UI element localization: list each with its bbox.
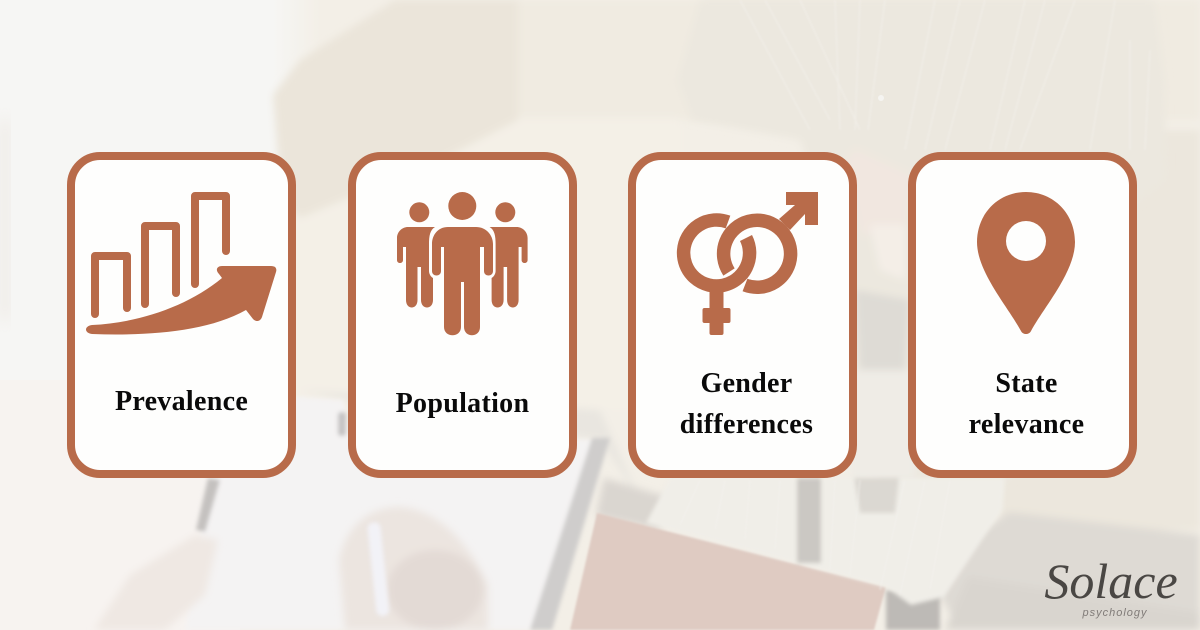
sofa	[515, 0, 1200, 120]
card: Gender differences	[628, 152, 857, 478]
label: differences	[680, 409, 813, 440]
shirt top	[677, 0, 1166, 500]
label: relevance	[969, 409, 1084, 440]
logo: Solace psychology: psychology	[1081, 607, 1148, 619]
shirt button	[878, 95, 884, 101]
card: State relevance	[908, 152, 1137, 478]
strip behind the table	[596, 478, 670, 530]
hands at lap	[845, 148, 912, 235]
label	[680, 368, 813, 440]
shirt stripes	[680, 0, 1150, 595]
label: Prevalence	[115, 386, 248, 417]
clipboard	[185, 392, 600, 630]
pen	[367, 522, 390, 616]
icon: location pin	[977, 192, 1075, 334]
table	[570, 513, 886, 630]
writing hands	[94, 535, 218, 630]
label	[969, 368, 1084, 440]
shirt bottom	[646, 478, 1005, 605]
person's legs	[886, 590, 940, 630]
label: Gender	[700, 368, 792, 399]
card: Population	[348, 152, 577, 478]
floor and sofa base, lower right	[925, 512, 1200, 630]
card: Prevalence	[67, 152, 296, 478]
shirt middle	[850, 370, 915, 480]
label: State	[995, 368, 1058, 399]
icon: interlocked gender symbols	[676, 192, 818, 335]
icon: three people	[397, 192, 528, 336]
icon: rising bar chart with arrow	[86, 192, 276, 334]
label: Population	[396, 388, 529, 419]
